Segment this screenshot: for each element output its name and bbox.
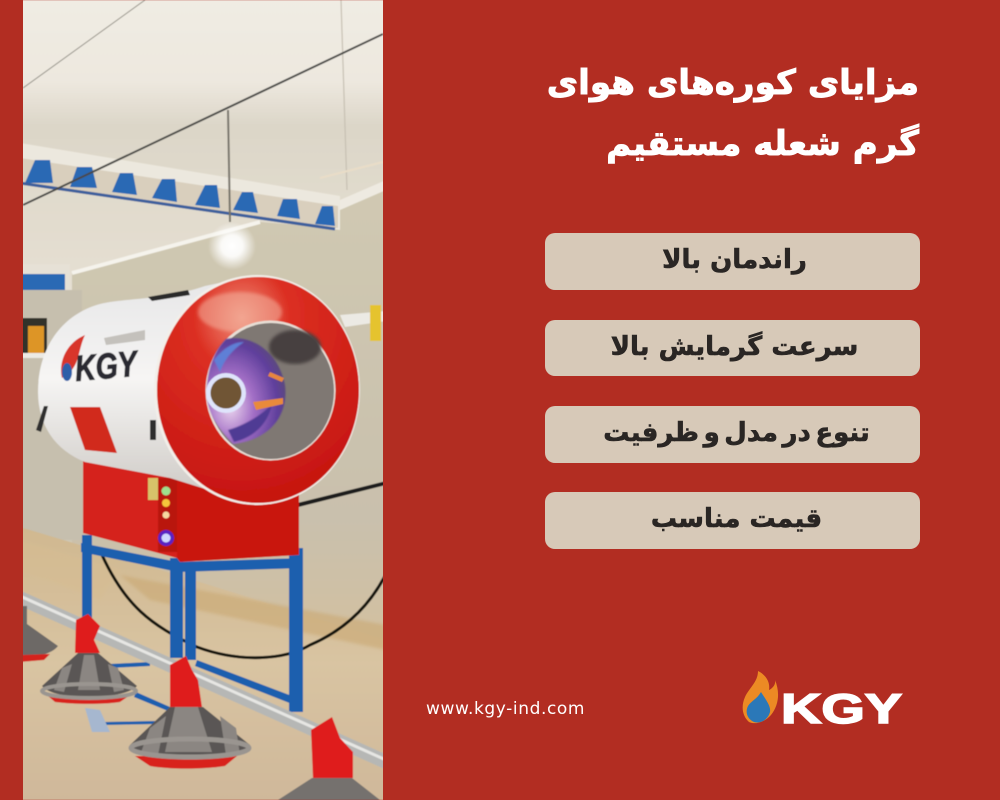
wall-ceiling trim [72,222,260,273]
logo on body [61,330,145,389]
warning label [70,407,117,453]
furnace red control box [83,460,299,562]
card: good price [545,492,920,549]
feeder left [20,606,58,662]
ceiling beam with blue web [20,143,340,230]
photo: direct-flame hot air furnace in poultry house [23,0,383,800]
furnace stand blue frame [81,535,303,732]
floor [20,527,386,800]
feeder front [130,656,250,769]
logo on body: KGY [73,343,141,389]
feeder pipe [20,598,386,762]
title: مزایای کوره‌های هوای [547,63,919,103]
furnace cable [298,483,386,505]
title: گرم شعله مستقیم [606,124,919,164]
logo: KGY [742,671,903,728]
card: model variety [545,406,920,463]
title [547,63,920,164]
furnace red front ring [154,275,360,505]
card text: سرعت گرمایش بالا [611,332,858,362]
far wall [72,190,386,660]
left wall strip [20,290,82,540]
card text: راندمان بالا [662,245,807,275]
yellow pipe fittings [20,305,386,358]
feeder right [278,717,380,800]
icon: flame and drop [743,671,778,723]
flame [207,338,286,444]
card: high efficiency [545,233,920,290]
room background [20,0,386,800]
hanging lamp [208,110,256,270]
website url: www.kgy-ind.com [426,699,585,719]
furnace white cylinder body [36,275,257,505]
feeder middle [42,614,137,704]
card text: قیمت مناسب [651,504,822,534]
ceiling [20,0,386,300]
ceiling cable [23,34,383,205]
card text: تنوع در مدل و ظرفیت [603,418,870,448]
furnace opening [206,320,336,460]
card: fast heating [545,320,920,376]
